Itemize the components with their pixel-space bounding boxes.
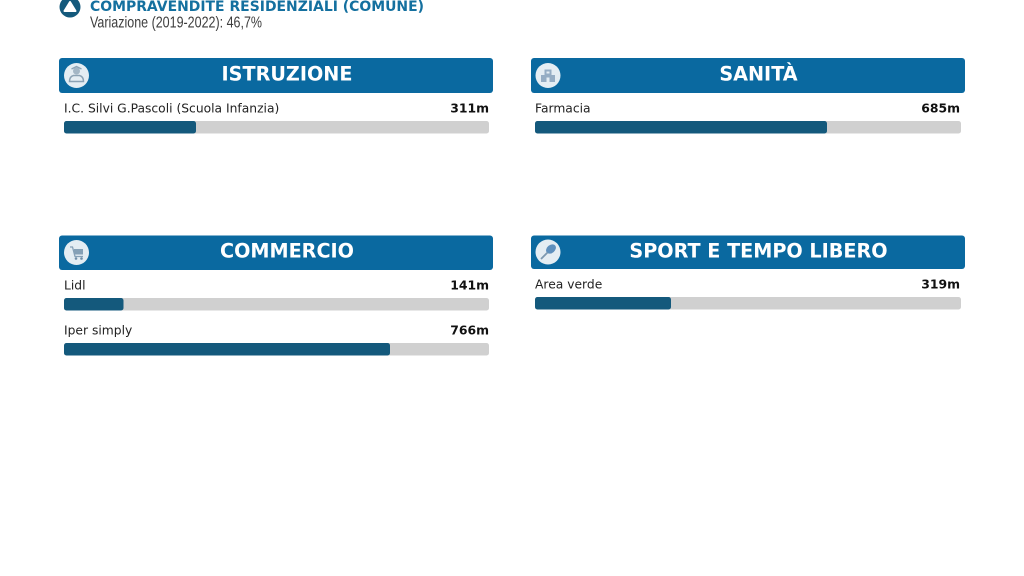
item: area verde: 319m [921, 276, 960, 292]
heading bar: sport [531, 236, 965, 269]
heading bar: sanita: SANITÀ [719, 62, 798, 86]
item: farmacia: 685m [921, 100, 960, 116]
heading bar: commercio [59, 236, 493, 270]
item: farmacia [535, 100, 961, 134]
panel: sport e tempo libero [531, 236, 965, 310]
text: variation: Variazione (2019-2022): 46,7% [90, 14, 262, 32]
icon: pharmacy [536, 63, 560, 88]
header: residential sales [60, 0, 424, 32]
item: scuola infanzia: I.C. Silvi G.Pascoli (Scuola Infanzia) [64, 102, 279, 116]
item: lidl: 141m [450, 278, 489, 292]
icon: shopping cart [64, 240, 89, 265]
heading bar: sport: SPORT E TEMPO LIBERO [629, 240, 888, 262]
item: area verde: Area verde [535, 278, 602, 292]
item: area verde [535, 276, 961, 310]
heading bar: istruzione [59, 58, 493, 93]
item: lidl [64, 278, 489, 310]
heading bar: istruzione: ISTRUZIONE [222, 62, 352, 86]
item: farmacia: Farmacia [535, 102, 591, 116]
icon: racket [536, 240, 560, 264]
item: iper simply: 766m [450, 322, 489, 338]
heading bar: sanita [531, 58, 965, 93]
item: iper simply [64, 322, 489, 356]
item: scuola infanzia [64, 100, 489, 134]
item: lidl: Lidl [64, 278, 86, 292]
panel: istruzione [59, 58, 493, 134]
panel: sanita [531, 58, 965, 134]
item: scuola infanzia: 311m [450, 100, 489, 116]
item: iper simply: Iper simply [64, 324, 132, 338]
icon: triangle badge [60, 0, 80, 18]
panel: commercio [59, 236, 493, 356]
icon: teacher [64, 63, 89, 88]
heading bar: commercio: COMMERCIO [220, 240, 354, 262]
